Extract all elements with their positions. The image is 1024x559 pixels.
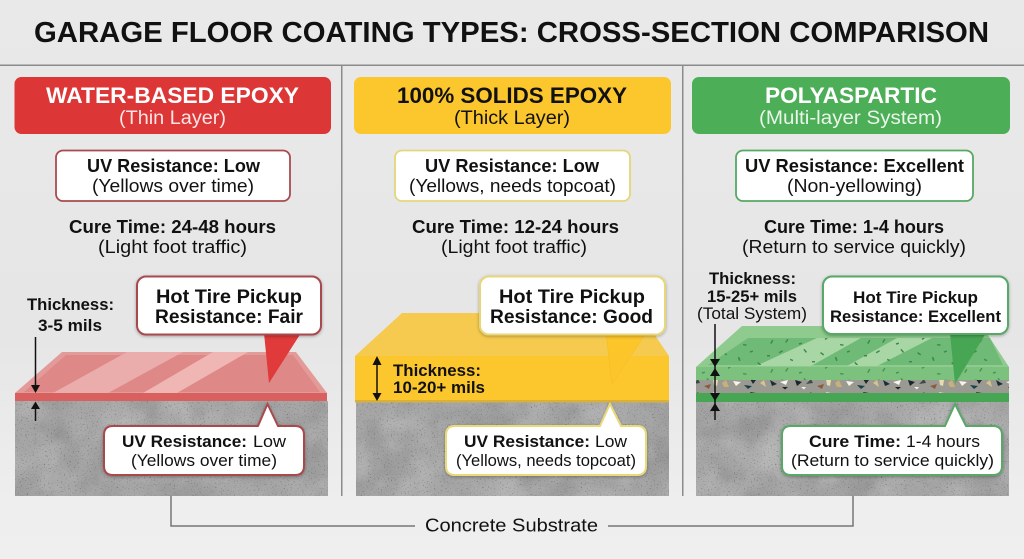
coating front edge <box>355 356 669 402</box>
callout: UV resistance low: UV Resistance: <box>122 432 247 451</box>
coating top surface <box>355 313 669 356</box>
UV resistance box: UV Resistance: Low <box>425 156 600 176</box>
header: 100% solids epoxy: 100% SOLIDS EPOXY <box>397 83 627 108</box>
callout: hot tire pickup excellent: Resistance: Excellent <box>830 307 1001 326</box>
callout: hot tire pickup fair: Resistance: Fair <box>155 307 304 328</box>
header: polyaspartic <box>692 77 1010 134</box>
thickness label: 15-25+ mils <box>707 287 797 306</box>
cure time text <box>742 217 966 257</box>
thickness label <box>27 295 114 335</box>
flake layer <box>696 380 1009 393</box>
UV resistance box: (Non-yellowing) <box>787 176 922 196</box>
header: water-based epoxy <box>14 77 331 134</box>
concrete block <box>696 402 1009 496</box>
header: polyaspartic: (Multi-layer System) <box>759 108 942 129</box>
panel: water-based epoxy <box>14 77 331 496</box>
cure time text: Cure Time: 1-4 hours <box>764 217 944 237</box>
callout: UV resistance low: Low <box>253 432 287 451</box>
cure time text <box>69 217 276 257</box>
thickness label: Thickness: <box>27 295 114 314</box>
thickness arrows <box>710 324 720 420</box>
header: 100% solids epoxy <box>354 77 671 134</box>
callout: UV resistance low: (Yellows, needs topcoat) <box>456 451 636 470</box>
cross-section: thin coating on concrete <box>15 352 328 496</box>
thickness label: Thickness: <box>709 269 796 288</box>
callout: UV resistance low: UV Resistance: <box>464 432 590 451</box>
cure time text <box>412 217 619 257</box>
thickness label: (Total System) <box>697 304 807 323</box>
cross-section: multi-layer system on concrete <box>696 326 1009 496</box>
callout: UV resistance low: Low <box>595 432 628 451</box>
thickness label: Thickness: <box>393 361 481 380</box>
panel: 100% solids epoxy <box>354 77 671 496</box>
UV resistance box <box>56 150 290 201</box>
UV resistance box: UV Resistance: Low <box>87 156 261 176</box>
header: water-based epoxy: (Thin Layer) <box>119 108 226 129</box>
callout: UV resistance low: (Yellows over time) <box>131 451 277 470</box>
UV resistance box <box>736 150 973 201</box>
cure time text: (Light foot traffic) <box>441 237 587 257</box>
UV resistance box: (Yellows, needs topcoat) <box>409 176 616 196</box>
UV resistance box: (Yellows over time) <box>92 176 254 196</box>
thickness arrow <box>372 356 382 401</box>
callout: cure time <box>782 404 1002 475</box>
callout: hot tire pickup fair <box>137 276 321 383</box>
thickness label: 10-20+ mils <box>393 378 485 397</box>
callout: hot tire pickup excellent <box>823 276 1008 384</box>
coating front edge <box>15 393 327 401</box>
thickness label <box>393 361 485 397</box>
callout: hot tire pickup good: Resistance: Good <box>490 307 653 328</box>
cure time text: (Light foot traffic) <box>98 237 247 257</box>
clear coat front <box>696 367 1009 380</box>
callout: hot tire pickup good <box>480 276 665 384</box>
coating top surface <box>15 352 327 393</box>
concrete block <box>15 401 328 496</box>
callout: cure time: 1-4 hours <box>906 432 980 451</box>
cure time text: Cure Time: 12-24 hours <box>412 217 619 237</box>
title: GARAGE FLOOR COATING TYPES: CROSS-SECTION COMPARISON <box>34 17 989 49</box>
concrete block <box>356 402 669 496</box>
callout: hot tire pickup good: Hot Tire Pickup <box>499 287 645 308</box>
callout: cure time: (Return to service quickly) <box>791 451 994 470</box>
thickness label: 3-5 mils <box>38 316 102 335</box>
UV resistance box: UV Resistance: Excellent <box>745 156 964 176</box>
header: 100% solids epoxy: (Thick Layer) <box>454 108 570 129</box>
header: polyaspartic: POLYASPARTIC <box>765 83 937 108</box>
callout: hot tire pickup fair: Hot Tire Pickup <box>156 287 302 308</box>
callout: UV resistance low <box>446 404 646 475</box>
concrete substrate connector <box>171 496 853 536</box>
header: water-based epoxy: WATER-BASED EPOXY <box>46 83 299 108</box>
callout: cure time: Cure Time: <box>809 432 901 451</box>
UV resistance box <box>395 150 630 201</box>
callout: hot tire pickup excellent: Hot Tire Pickup <box>853 288 978 307</box>
panel: polyaspartic <box>692 77 1010 496</box>
cross-section: thick coating on concrete <box>355 313 669 496</box>
thickness arrows <box>31 337 40 421</box>
cure time text: (Return to service quickly) <box>742 237 966 257</box>
cure time text: Cure Time: 24-48 hours <box>69 217 276 237</box>
thickness label <box>697 269 807 323</box>
clear top surface <box>696 326 1009 367</box>
base coat <box>696 393 1009 402</box>
concrete substrate connector: Concrete Substrate <box>425 516 598 536</box>
callout: UV resistance low <box>104 404 304 475</box>
